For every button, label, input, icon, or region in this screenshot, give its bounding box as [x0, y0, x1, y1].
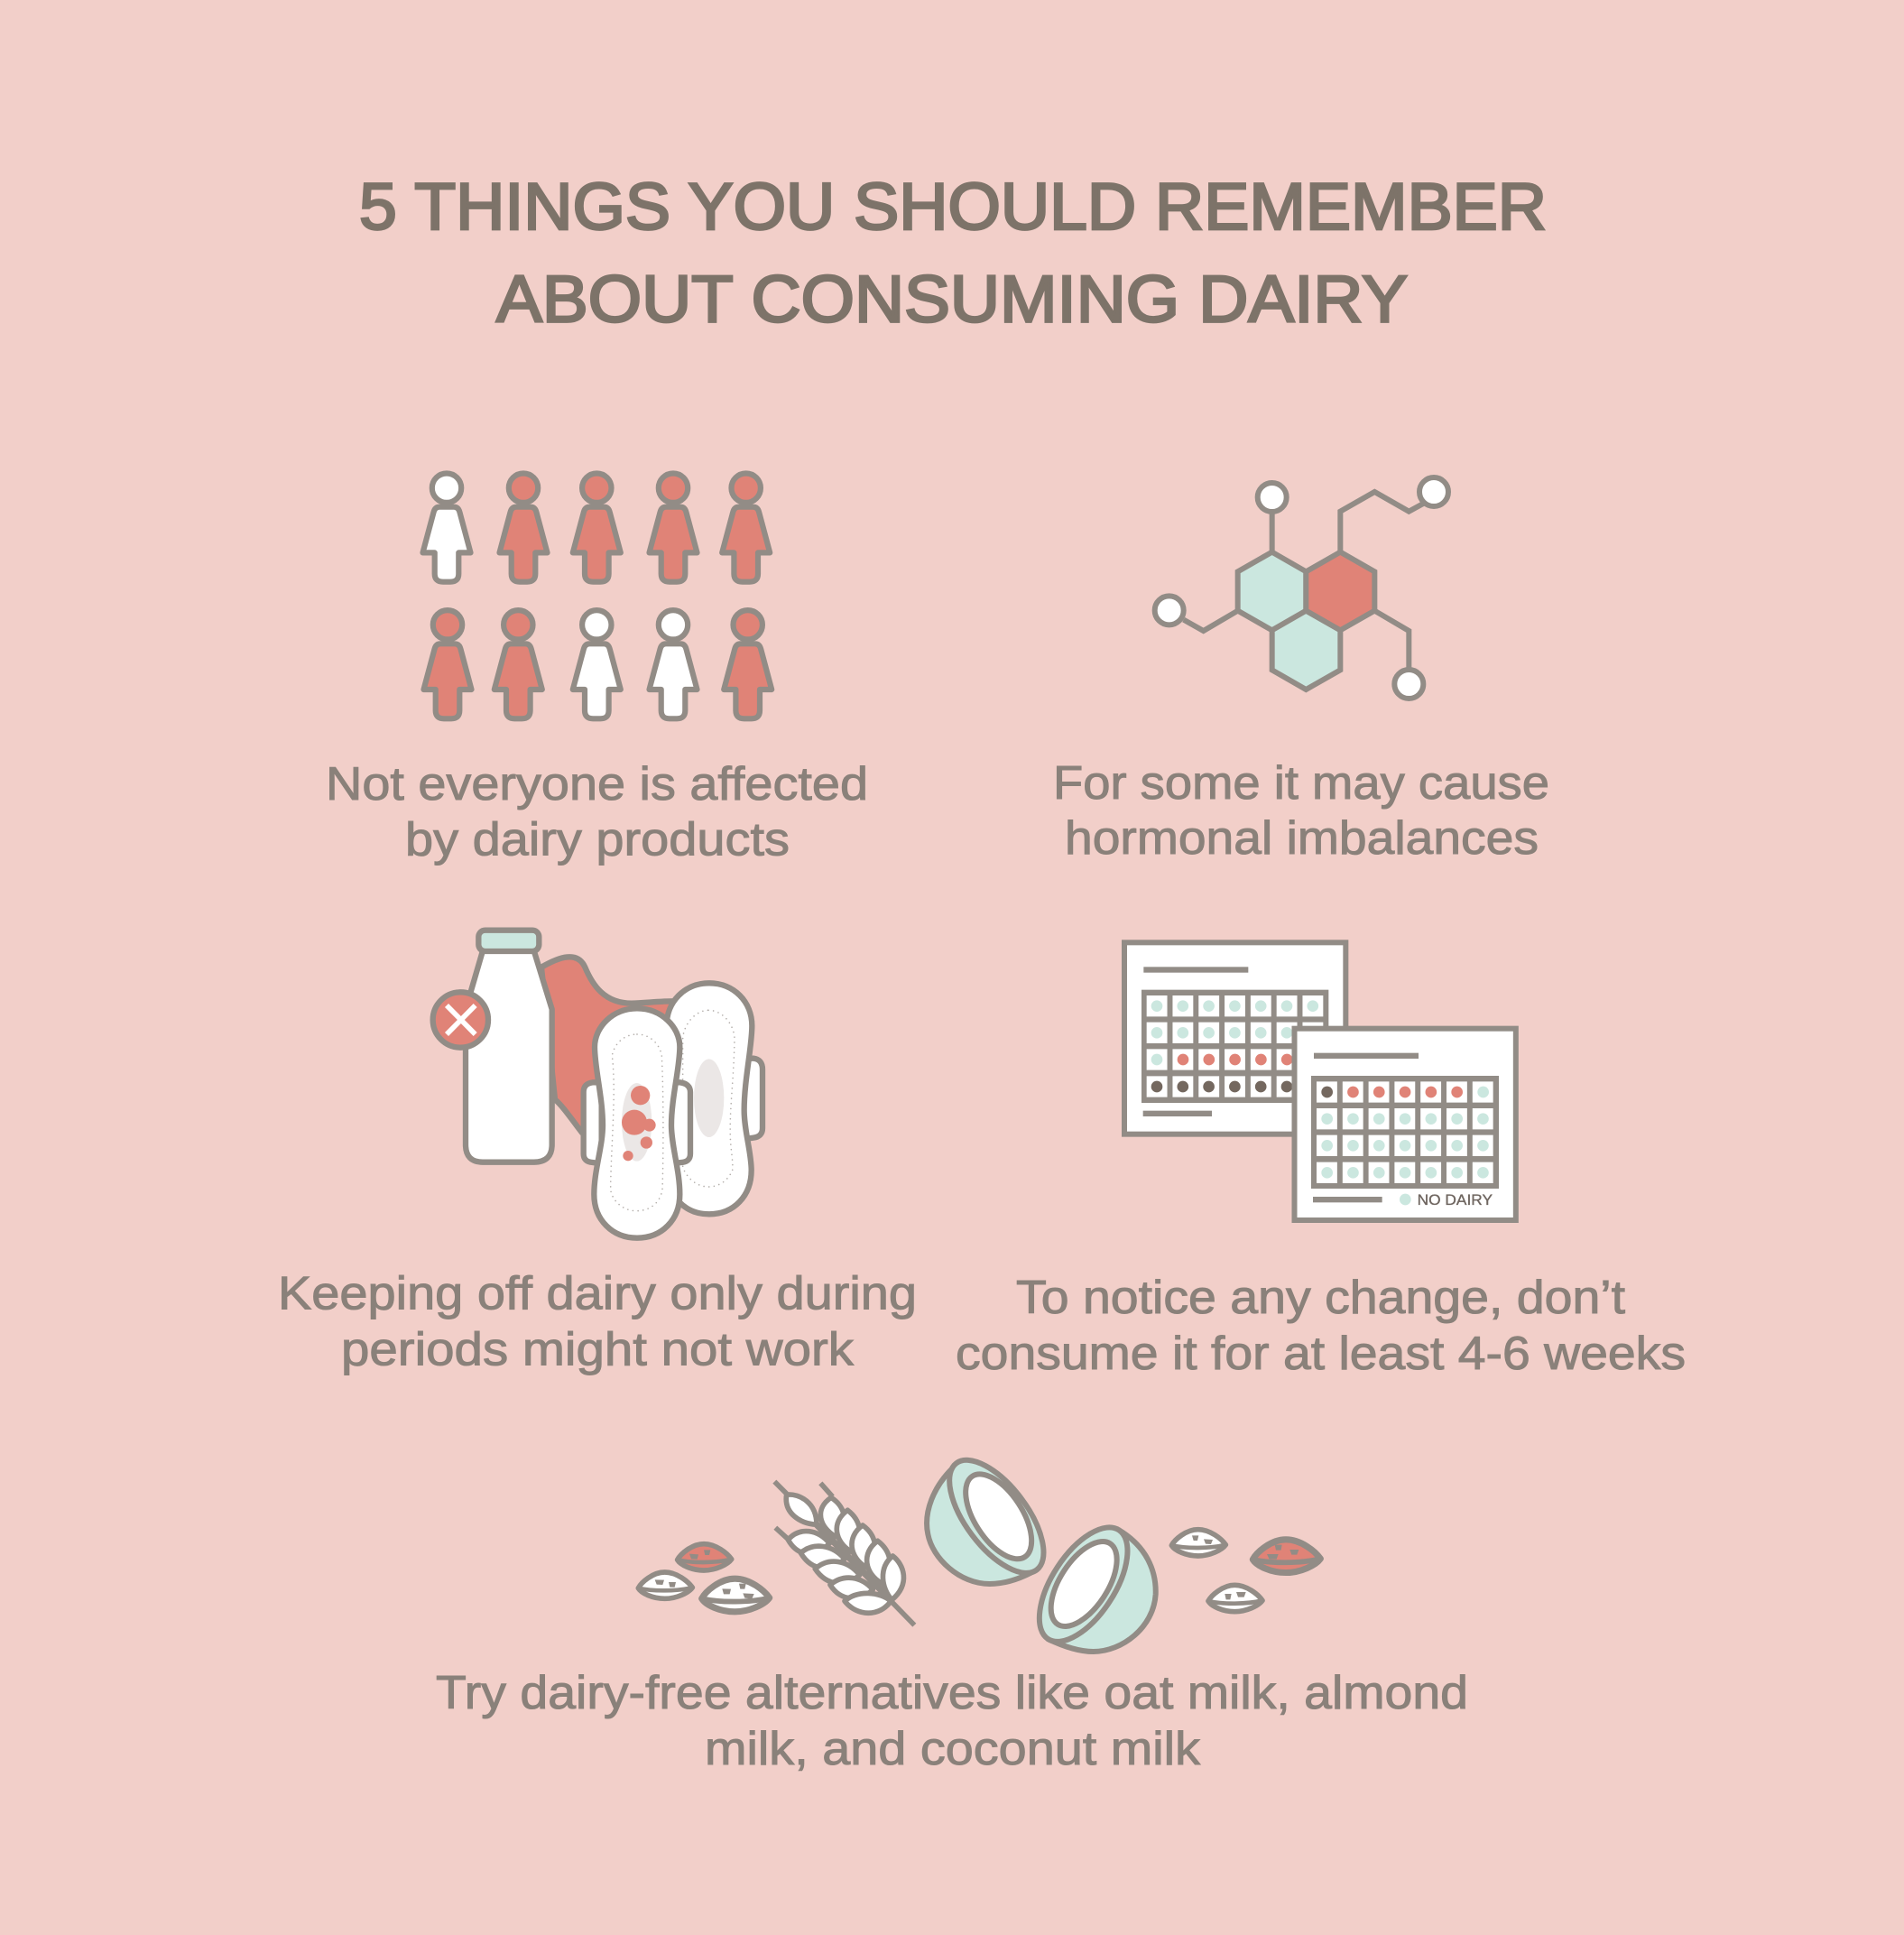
text: keeping off dairy: periods might not work	[341, 1323, 854, 1375]
text: hormonal imbalances: hormonal imbalances	[1065, 811, 1539, 864]
title: ABOUT CONSUMING DAIRY	[496, 264, 1408, 336]
bottle cap	[478, 930, 539, 951]
back pad core	[694, 1059, 724, 1137]
icon: ten women, three unaffected	[422, 473, 772, 718]
front pad core	[622, 1083, 652, 1162]
icon: hormone molecule	[1155, 477, 1448, 699]
text: keeping off dairy: Keeping off dairy only during	[278, 1267, 917, 1319]
title: 5 THINGS YOU SHOULD REMEMBER	[359, 171, 1547, 244]
legend: no dairy: NO DAIRY	[1418, 1191, 1493, 1208]
front pad wings	[584, 1082, 690, 1163]
text: notice any change	[956, 1271, 1686, 1379]
coconut left	[927, 1445, 1061, 1588]
milk bottle	[466, 950, 552, 1162]
front pad stitching	[611, 1034, 663, 1211]
front pad	[594, 1008, 679, 1238]
icon: almonds, oat and coconuts	[638, 1445, 1320, 1656]
icon: almonds left	[638, 1544, 770, 1612]
icon: coconuts	[927, 1445, 1156, 1656]
text: dairy-free alternatives	[436, 1666, 1468, 1774]
underwear	[541, 957, 674, 1140]
text: notice any change: To notice any change, don’t	[1016, 1271, 1625, 1323]
icon: almonds right	[1171, 1530, 1320, 1612]
text: hormonal imbalances	[1053, 756, 1549, 864]
front calendar	[1294, 1029, 1516, 1220]
text: notice any change: consume it for at least 4-6 weeks	[956, 1327, 1686, 1379]
text: not everyone is affected	[326, 757, 868, 865]
icon: milk bottle, underwear and sanitary pads	[433, 930, 763, 1238]
text: not everyone is affected: Not everyone is affected	[326, 757, 868, 810]
no sign	[433, 992, 488, 1048]
coconut right	[1021, 1513, 1156, 1656]
text: keeping off dairy	[278, 1267, 917, 1375]
blood spots	[622, 1086, 656, 1161]
back pad	[667, 983, 752, 1214]
back pad wing	[743, 1059, 763, 1139]
text: dairy-free alternatives: milk, and coconut milk	[705, 1722, 1200, 1774]
back pad stitching	[683, 1010, 735, 1187]
title	[359, 171, 1547, 336]
text: dairy-free alternatives: Try dairy-free alternatives like oat milk, almond	[436, 1666, 1468, 1718]
back calendar	[1124, 942, 1345, 1134]
icon: two calendars	[1124, 942, 1516, 1220]
text: hormonal imbalances: For some it may cause	[1053, 756, 1549, 809]
text: not everyone is affected: by dairy products	[405, 812, 790, 865]
icon: oat stalk	[774, 1482, 914, 1625]
